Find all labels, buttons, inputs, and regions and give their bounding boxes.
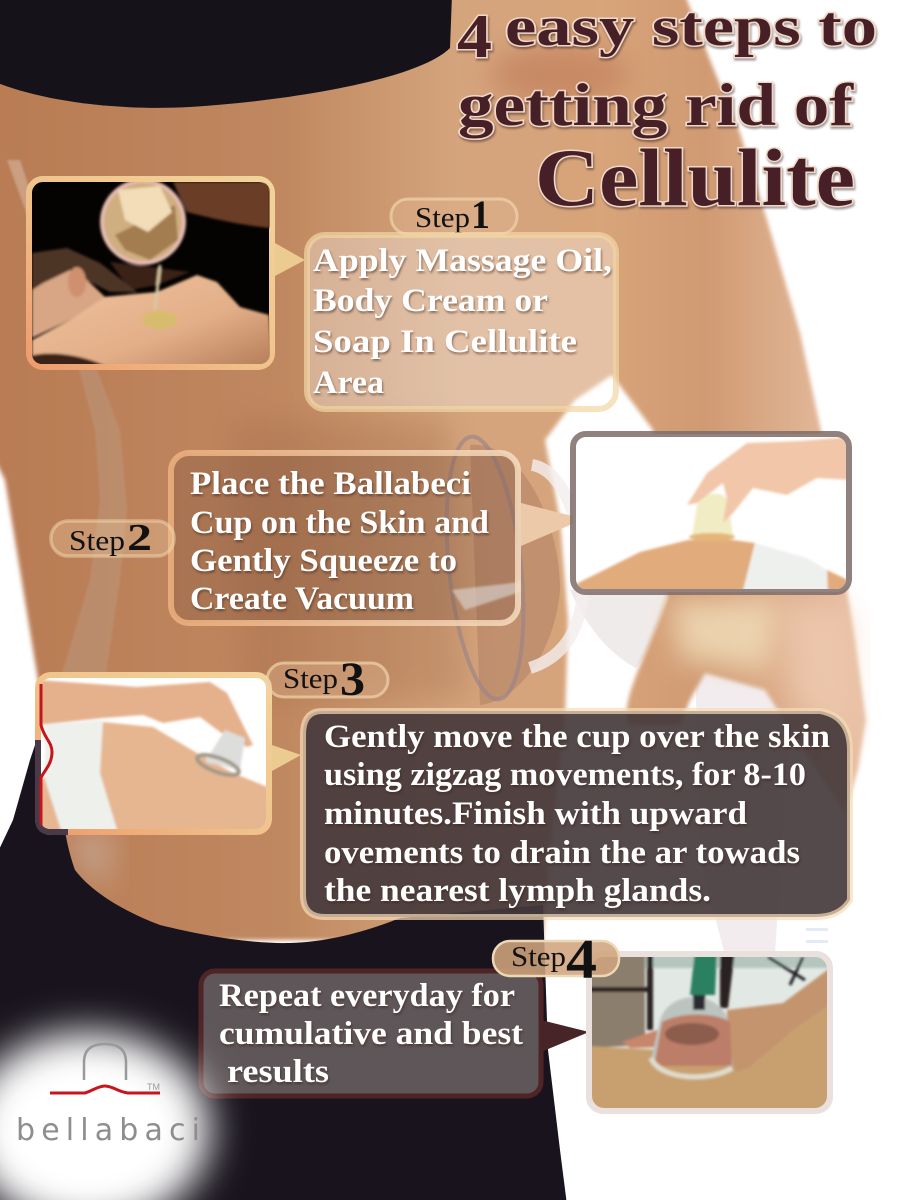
title numeral: 4 bbox=[457, 3, 492, 71]
arm bbox=[38, 680, 253, 747]
cup inner skin bbox=[654, 1014, 732, 1066]
step 3 label bbox=[267, 653, 388, 706]
hair bbox=[32, 248, 137, 292]
cup inner shadow bbox=[665, 1023, 719, 1045]
step 2 text box bbox=[171, 453, 518, 623]
cup rim bbox=[651, 1058, 732, 1077]
back shading bbox=[230, 420, 470, 700]
step 3 text box: the nearest lymph glands. bbox=[324, 873, 711, 909]
step number: 1 bbox=[471, 192, 490, 237]
black crossed rods bbox=[768, 957, 805, 985]
pale blond hand highlight bbox=[670, 600, 780, 670]
logo wordmark: bellabaci bbox=[16, 1113, 200, 1148]
left dark border bbox=[38, 740, 68, 832]
arrow: step 4 bbox=[541, 1020, 589, 1052]
step word: Step bbox=[511, 942, 566, 973]
arrow: step 1 bbox=[275, 243, 305, 276]
oil pool bbox=[142, 311, 178, 329]
step number: 4 bbox=[566, 929, 597, 991]
step 2 text box: Place the Ballabeci bbox=[190, 466, 471, 502]
logo tm: TM bbox=[147, 1082, 160, 1092]
step 4 text box: results bbox=[227, 1054, 329, 1090]
cup device handle bbox=[695, 660, 790, 955]
palm highlight bbox=[780, 600, 850, 740]
step word: Step bbox=[69, 526, 125, 557]
black top bbox=[0, 0, 452, 108]
white bulb bbox=[570, 590, 668, 668]
step 2 text box: Cup on the Skin and bbox=[190, 505, 489, 541]
bottom shadow bbox=[32, 352, 105, 364]
cup dome bbox=[651, 997, 733, 1067]
cup glare bbox=[452, 582, 520, 610]
step 4 text box: Repeat everyday for bbox=[219, 978, 515, 1014]
device small print bbox=[806, 928, 828, 943]
cup bbox=[205, 730, 245, 770]
white briefs bbox=[45, 720, 118, 833]
face bbox=[32, 270, 105, 338]
glass cup bbox=[435, 433, 583, 705]
cup dark interior bbox=[470, 445, 560, 705]
logo arch bbox=[84, 1044, 126, 1080]
step 3 text box: Gently move the cup over the skin bbox=[324, 719, 830, 755]
back bbox=[32, 275, 272, 368]
white briefs bbox=[744, 544, 828, 589]
step 3 text box: using zigzag movements, for 8-10 bbox=[324, 757, 806, 793]
torso skin and arm bbox=[0, 0, 866, 940]
arrow: step 3 bbox=[272, 745, 301, 771]
logo: bellabaci bbox=[0, 1032, 210, 1200]
step 3 text box: minutes.Finish with upward bbox=[324, 796, 747, 832]
arm and hand bbox=[727, 968, 830, 1072]
step 1 photo: oil poured on back bbox=[29, 179, 272, 368]
dark shoulder band bbox=[110, 262, 190, 290]
body bbox=[576, 538, 756, 589]
step 1 label bbox=[391, 192, 517, 237]
logo red wave bbox=[50, 1086, 160, 1093]
back bbox=[588, 1005, 830, 1112]
glass with flower bbox=[102, 181, 184, 263]
red line bbox=[41, 684, 52, 825]
shoulder shading bbox=[490, 45, 630, 105]
step 4 text box bbox=[201, 971, 541, 1096]
step word: Step bbox=[415, 203, 470, 234]
step 4 label bbox=[493, 929, 619, 991]
cup rim bbox=[195, 751, 241, 779]
title line 3: Cellulite bbox=[535, 132, 855, 223]
title line 2: getting rid of bbox=[458, 72, 854, 138]
thigh bbox=[38, 722, 270, 833]
step 1 text box: Body Cream or bbox=[313, 283, 548, 319]
logo white glow bbox=[0, 1032, 210, 1200]
step 2 text box: Gently Squeeze to bbox=[190, 543, 457, 579]
step 4 photo: cup on back bbox=[588, 950, 830, 1112]
tube connector bbox=[693, 995, 705, 1010]
spine band upper bbox=[7, 160, 50, 250]
step 4 text box: cumulative and best bbox=[219, 1016, 523, 1052]
forearm bbox=[173, 182, 270, 228]
step 2 text box: Create Vacuum bbox=[190, 581, 414, 617]
green tube bbox=[690, 950, 717, 995]
spine band bbox=[60, 365, 127, 680]
step 3 text box: ovements to drain the ar towads bbox=[324, 835, 800, 871]
step 1 text box: Apply Massage Oil, bbox=[313, 243, 612, 279]
petal highlights bbox=[118, 186, 172, 232]
hand bbox=[687, 437, 850, 523]
step 1 text box bbox=[307, 235, 616, 409]
dark rails and posts bbox=[588, 950, 735, 1030]
step number: 2 bbox=[127, 517, 152, 559]
step number: 3 bbox=[340, 653, 365, 706]
thigh bbox=[826, 569, 846, 589]
step 2 label bbox=[51, 517, 174, 559]
lower back pale patch bbox=[65, 830, 115, 890]
step 3 photo: moving the cup bbox=[38, 675, 270, 833]
cup bbox=[692, 494, 733, 536]
cup bulb bbox=[530, 465, 583, 668]
step 1 text box: Soap In Cellulite bbox=[313, 324, 577, 360]
step 3 text box bbox=[303, 711, 850, 917]
cup rim bbox=[689, 533, 735, 541]
step 2 photo: placing the cup bbox=[570, 434, 850, 595]
cup rim bbox=[435, 433, 535, 703]
black pants bbox=[0, 715, 567, 1200]
fingers bbox=[622, 1030, 660, 1048]
flower shading bbox=[115, 205, 178, 260]
ear bbox=[68, 267, 86, 297]
arrow: step 2 bbox=[521, 503, 584, 546]
oil stream bbox=[155, 265, 160, 310]
window top band bbox=[644, 957, 827, 971]
step 1 text box: Area bbox=[313, 365, 384, 401]
title bbox=[457, 0, 877, 223]
step word: Step bbox=[283, 664, 338, 695]
left block bbox=[588, 950, 645, 1048]
